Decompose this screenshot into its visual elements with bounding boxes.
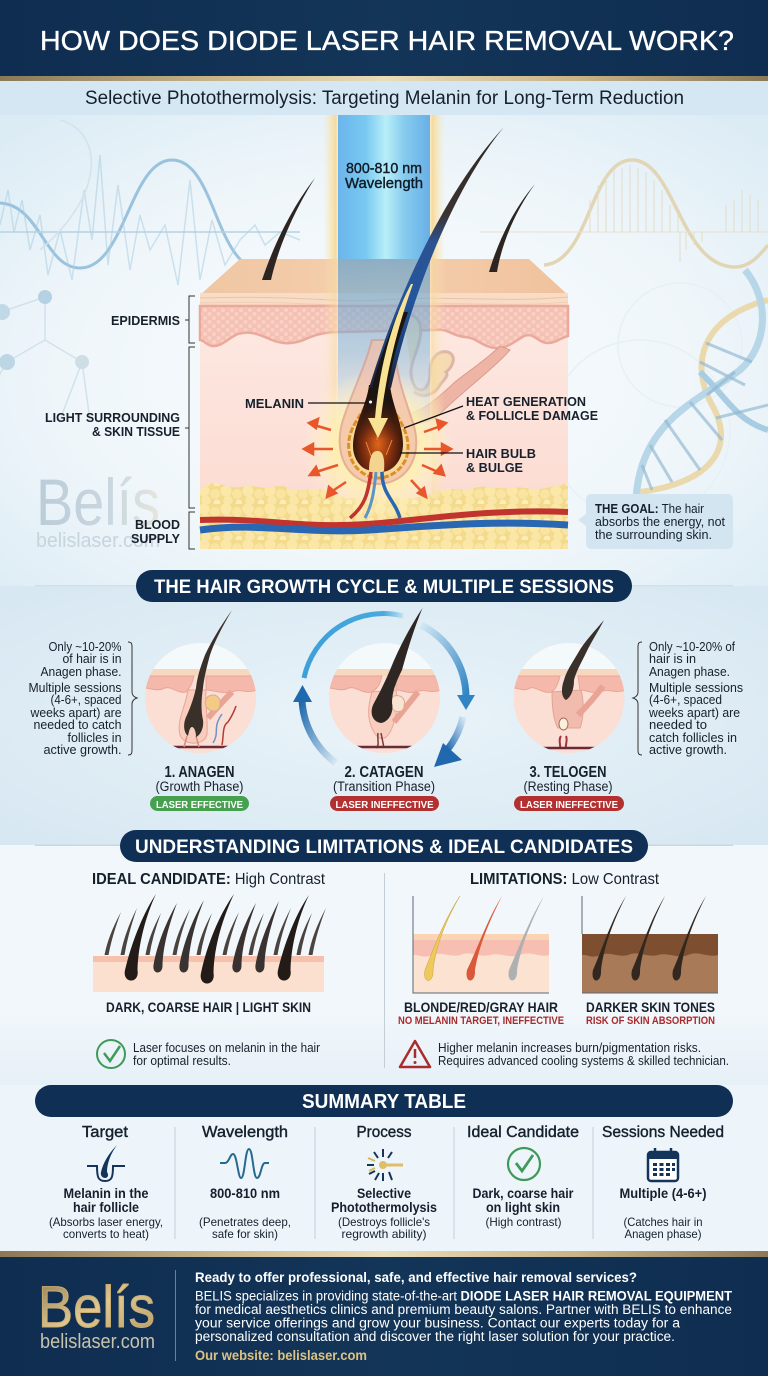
caption: blonde red gray: NO MELANIN TARGET, INEFFECTIVE: [398, 1015, 564, 1027]
heading: summary table: [35, 1085, 733, 1117]
text: website: Our website: belislaser.com: [195, 1347, 367, 1363]
callout: the goal: [578, 494, 733, 549]
panel: hero diagram background: [0, 115, 768, 586]
background: science decoration: [0, 120, 768, 520]
heading: limitations low contrast: LIMITATIONS: Low Contrast: [470, 871, 660, 888]
caption: blonde red gray: [398, 999, 564, 1027]
column: wavelength: safe for skin): [212, 1227, 278, 1241]
column: process: Process: [356, 1124, 412, 1141]
panel: hair growth cycle: [0, 570, 768, 845]
label: heat generation: HEAT GENERATION: [466, 394, 586, 409]
text: higher melanin: Higher melanin increases burn/pigmentation risks.: [438, 1041, 701, 1055]
note: right: active growth.: [649, 743, 727, 757]
phase label: anagen: 1. ANAGEN: [164, 764, 234, 781]
icon: check: [508, 1148, 540, 1180]
phase illustration: anagen: [145, 610, 257, 753]
column: process: regrowth ability): [342, 1227, 426, 1241]
hair: left: [262, 178, 315, 280]
label: blood supply: BLOOD: [135, 517, 180, 532]
note: left: Anagen phase.: [40, 665, 122, 679]
label: light surrounding and skin tissue: [45, 410, 180, 439]
title: HOW DOES DIODE LASER HAIR REMOVAL WORK?: [40, 25, 734, 56]
brace: right: [633, 642, 642, 755]
column: ideal candidate: Ideal Candidate: [467, 1124, 579, 1141]
phase label: anagen: [150, 764, 249, 811]
text: laser focuses: for optimal results.: [133, 1054, 231, 1068]
note: left: [28, 640, 122, 757]
phase illustration: telogen: [514, 620, 626, 753]
note: right: Multiple sessions: [649, 681, 743, 695]
text: laser focuses: [133, 1041, 320, 1068]
column: sessions needed: Multiple (4-6+): [620, 1185, 706, 1201]
note: right: [648, 640, 743, 757]
heading: summary table: SUMMARY TABLE: [302, 1091, 466, 1113]
column: process: [331, 1124, 437, 1241]
label: melanin: [245, 396, 372, 411]
note: left: Only ~10-20%: [48, 640, 122, 654]
watermark: Belis: belislaser.com: [36, 530, 160, 552]
laser beam: [323, 115, 445, 493]
phase label: telogen: [514, 764, 624, 811]
label: heat generation: & FOLLICLE DAMAGE: [466, 408, 598, 423]
note: left: Multiple sessions: [28, 681, 122, 695]
note: right: weeks apart) are: [648, 706, 740, 720]
label: epidermis: EPIDERMIS: [111, 313, 180, 328]
wavelength label: 800-810 nm: [346, 160, 422, 177]
column: ideal candidate: on light skin: [486, 1199, 560, 1215]
column: target: Target: [82, 1124, 129, 1141]
phase label: catagen: (Transition Phase): [333, 779, 435, 794]
label: melanin: MELANIN: [245, 396, 304, 411]
icon: selective photothermolysis: [367, 1149, 403, 1181]
column: sessions needed: [602, 1124, 724, 1241]
panel: summary table: [0, 1085, 768, 1255]
column: target: (Absorbs laser energy,: [49, 1215, 163, 1229]
note: left: active growth.: [44, 743, 122, 757]
heading: limitations: [120, 830, 648, 862]
blood vessels: [200, 472, 568, 531]
note: left: needed to catch: [34, 718, 122, 732]
note: right: needed to: [649, 718, 707, 732]
text: call to action: BELIS specializes in providing state-of-the-art DIODE LASER HAIR REMOVAL EQUIPMENT: [195, 1288, 733, 1304]
label: hair bulb: [400, 446, 536, 475]
fat layer: [200, 483, 568, 549]
note: right: catch follicles in: [649, 731, 737, 745]
note: left: weeks apart) are: [30, 706, 122, 720]
wavelength label: Wavelength: [345, 175, 423, 192]
epidermis layer: [200, 306, 568, 348]
phase label: catagen: [330, 764, 439, 811]
text: call to action: Ready to offer professional, safe, and effective hair removal services?: [195, 1269, 637, 1285]
text: higher melanin: [438, 1041, 729, 1068]
heat arrows: [304, 419, 451, 497]
header banner: [0, 0, 768, 77]
column: target: hair follicle: [73, 1199, 139, 1215]
column: ideal candidate: Dark, coarse hair: [472, 1185, 574, 1201]
heading: hair growth cycle: THE HAIR GROWTH CYCLE & MULTIPLE SESSIONS: [154, 577, 614, 598]
label: hair bulb: HAIR BULB: [466, 446, 536, 461]
caption: darker skin: RISK OF SKIN ABSORPTION: [586, 1015, 715, 1027]
phase label: anagen: LASER EFFECTIVE: [156, 799, 243, 811]
phase illustration: catagen: [329, 608, 441, 753]
note: right: (4-6+, spaced: [649, 693, 722, 707]
column: sessions needed: Anagen phase): [624, 1227, 702, 1241]
note: left: (4-6+, spaced: [50, 693, 122, 707]
text: laser focuses: Laser focuses on melanin in the hair: [133, 1041, 320, 1055]
column: wavelength: Wavelength: [202, 1124, 288, 1141]
hair: right: [489, 184, 535, 272]
phase label: catagen: LASER INEFFECTIVE: [336, 799, 434, 811]
skin cross-section: [200, 259, 568, 549]
text: higher melanin: Requires advanced cooling systems & skilled technician.: [438, 1054, 729, 1068]
cycle arrows: [293, 614, 475, 767]
column: sessions needed: (Catches hair in: [624, 1215, 702, 1229]
caption: darker skin: DARKER SKIN TONES: [586, 999, 715, 1015]
phase label: telogen: LASER INEFFECTIVE: [520, 799, 618, 811]
note: right: Only ~10-20% of: [649, 640, 735, 654]
label: blood supply: SUPPLY: [131, 531, 180, 546]
illustration: dark coarse hair on light skin: [93, 894, 326, 992]
heading: hair growth cycle: [136, 570, 632, 602]
callout: the goal: absorbs the energy, not: [595, 515, 726, 529]
watermark: Belis: Belís: [36, 465, 160, 539]
note: right: hair is in: [649, 652, 696, 666]
label: hair bulb: & BULGE: [466, 460, 523, 475]
column: process: (Destroys follicle's: [338, 1215, 430, 1229]
column: sessions needed: Sessions Needed: [602, 1124, 724, 1141]
beam through skin: [338, 259, 430, 493]
logo: Belis: belislaser.com: [40, 1331, 155, 1353]
text: call to action: [195, 1269, 733, 1344]
column: process: Selective: [357, 1185, 411, 1201]
column: target: converts to heat): [63, 1227, 149, 1241]
column: wavelength: (Penetrates deep,: [199, 1215, 291, 1229]
icon: green check: [97, 1040, 125, 1068]
main hair shaft: [357, 127, 504, 438]
caption: blonde red gray: BLONDE/RED/GRAY HAIR: [404, 999, 558, 1015]
text: call to action: personalized consultation and discover the right laser solution for your practice.: [195, 1329, 675, 1344]
phase label: telogen: (Resting Phase): [524, 779, 612, 794]
column: target: Melanin in the: [64, 1185, 149, 1201]
label: blood supply: [131, 517, 180, 546]
dermal papilla: [369, 451, 384, 473]
gold divider: [0, 1251, 768, 1257]
label: light surrounding and skin tissue: & SKIN TISSUE: [92, 424, 180, 439]
caption: darker skin: [586, 999, 715, 1027]
subtitle band: Selective Photothermolysis: Targeting Melanin for Long-Term Reduction: [85, 88, 684, 109]
text: call to action: your service offerings and grow your business. Contact our experts today for a: [195, 1316, 680, 1330]
note: left: follicles in: [68, 731, 122, 745]
column: process: Photothermolysis: [331, 1199, 437, 1215]
wavelength label: [345, 160, 423, 192]
text: call to action: for medical aesthetics clinics and premium beauty salons. Partner with BELIS to enhance: [195, 1302, 732, 1317]
phase label: telogen: 3. TELOGEN: [530, 764, 606, 781]
callout: the goal: THE GOAL: The hair: [595, 502, 704, 516]
label: heat generation: [404, 394, 598, 428]
logo: Belis: Belís: [38, 1275, 155, 1340]
label: light surrounding and skin tissue: LIGHT SURROUNDING: [45, 410, 180, 425]
hair bulb: [353, 385, 403, 472]
muscle: [408, 346, 510, 424]
follicle and bulb: [302, 340, 454, 521]
brace: left: [128, 642, 137, 755]
phase label: catagen: 2. CATAGEN: [344, 764, 424, 781]
illustration: blonde red gray hair: [413, 896, 549, 993]
sweat duct and gland: [403, 312, 453, 395]
column: ideal candidate: [467, 1124, 579, 1229]
caption: dark coarse hair: DARK, COARSE HAIR | LIGHT SKIN: [106, 999, 311, 1015]
heading: limitations: UNDERSTANDING LIMITATIONS & IDEAL CANDIDATES: [135, 837, 633, 858]
panel: footer: [0, 1257, 768, 1376]
column: wavelength: [199, 1124, 291, 1241]
column: target: [49, 1124, 163, 1241]
subtitle band: [0, 81, 768, 115]
icon: calendar: [648, 1148, 678, 1181]
brackets: [185, 296, 195, 549]
illustration: darker skin tones: [582, 896, 718, 993]
note: right: Anagen phase.: [649, 665, 730, 679]
callout: the goal: the surrounding skin.: [595, 528, 712, 542]
icon: warning: [400, 1041, 430, 1067]
phase label: anagen: (Growth Phase): [156, 779, 244, 794]
note: left: of hair is in: [62, 652, 122, 666]
column: ideal candidate: (High contrast): [486, 1215, 562, 1229]
yellow energy arrow: [368, 284, 413, 438]
icon: wave: [220, 1149, 269, 1178]
icon: hair follicle: [87, 1145, 125, 1181]
panel: limitations and ideal candidates: [0, 830, 768, 1085]
heading: ideal candidate: IDEAL CANDIDATE: High Contrast: [92, 871, 326, 888]
column: wavelength: 800-810 nm: [210, 1185, 280, 1201]
